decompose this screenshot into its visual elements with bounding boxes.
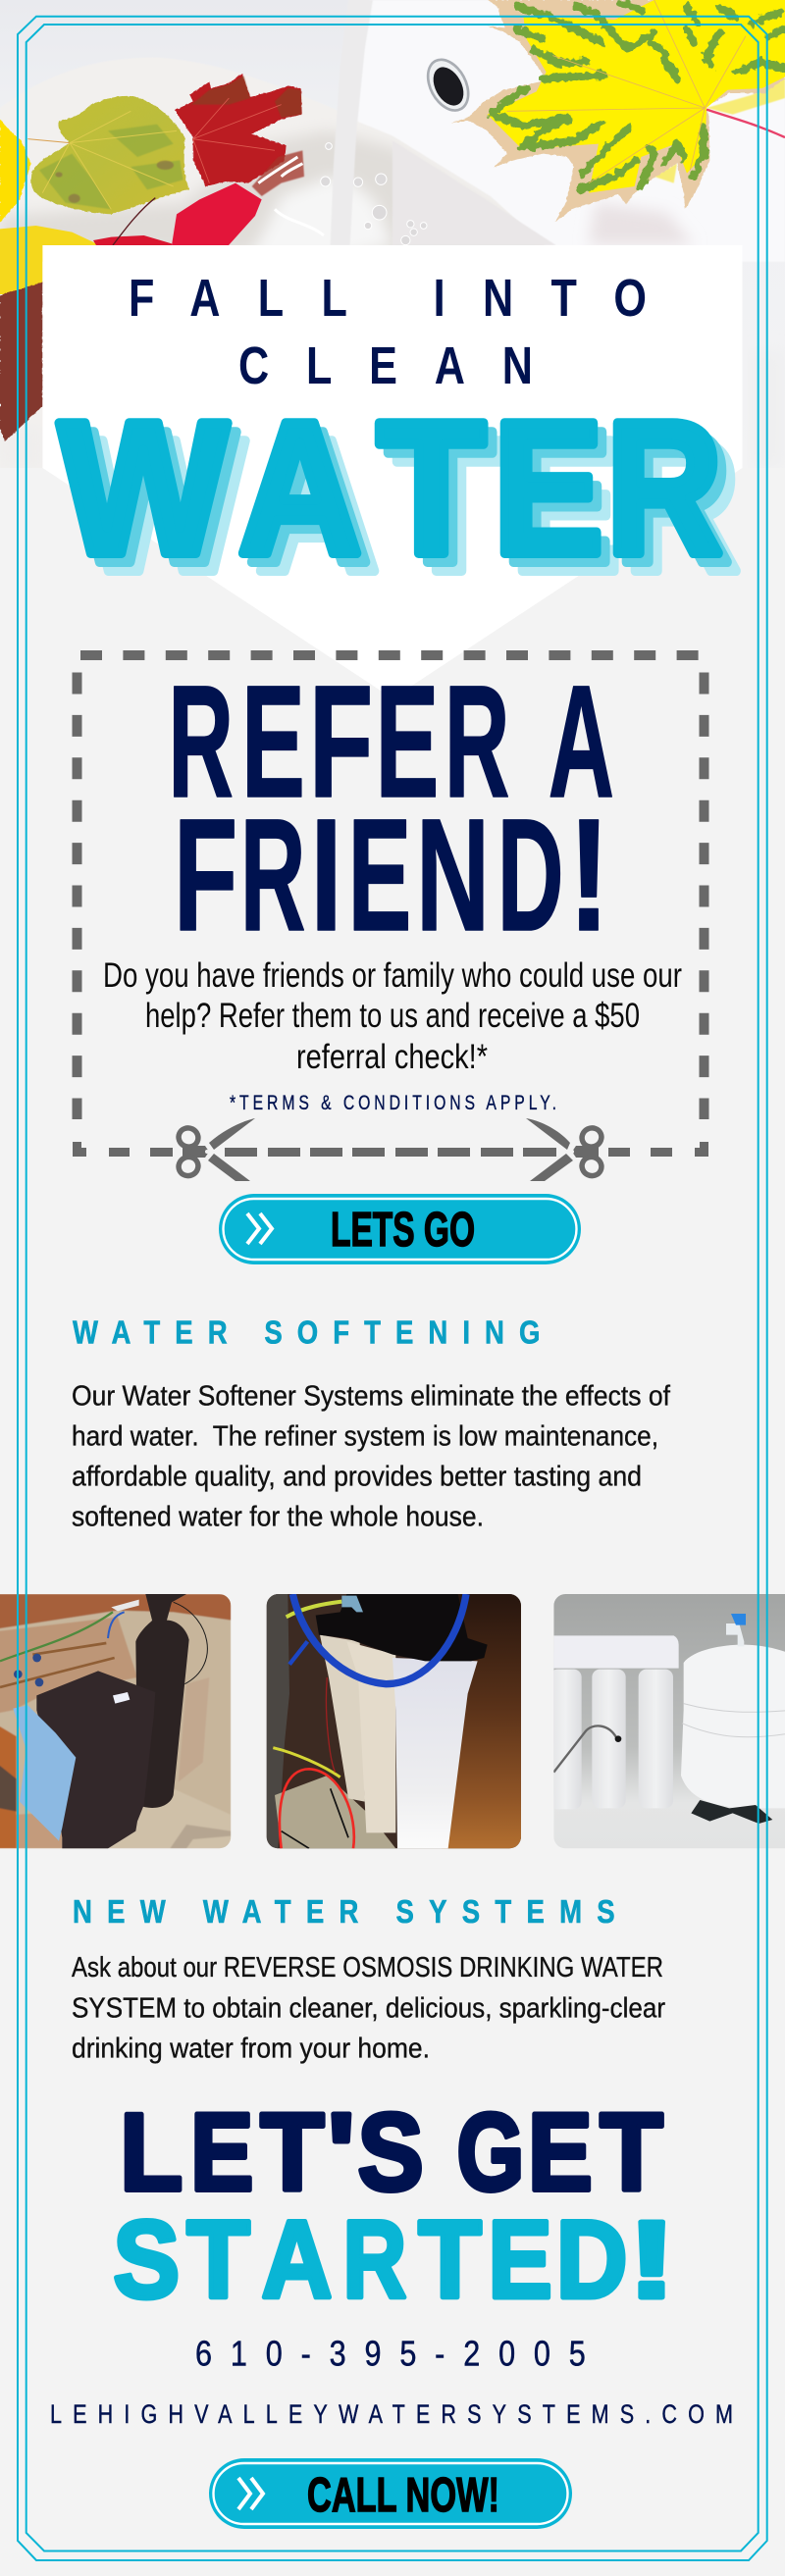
section body	[72, 1381, 671, 1533]
green heart leaf	[27, 96, 189, 214]
faucet tip	[615, 1735, 621, 1742]
button label: LETS GO	[331, 1204, 475, 1257]
black canister caps	[316, 1594, 488, 1661]
cta line 2: R	[343, 2198, 406, 2321]
dark cabinet	[267, 1594, 521, 1848]
filter canister one	[320, 1635, 365, 1802]
cta line 1: E	[528, 2091, 593, 2213]
basin background	[0, 0, 347, 37]
section: new water systems	[72, 1892, 665, 2065]
filter canister two	[346, 1641, 395, 1832]
icon: chevrons	[238, 2478, 263, 2509]
back shadow layer: A	[256, 399, 379, 611]
photo: under-sink filter canisters	[267, 1594, 521, 1848]
pipe valves	[14, 1654, 43, 1686]
referral description	[103, 956, 682, 1076]
heading line 1: F	[309, 651, 373, 831]
call to action: let's get started	[113, 2091, 676, 2321]
brown red leaf	[0, 282, 42, 441]
water splash	[258, 157, 324, 235]
softener tank	[135, 1594, 189, 1808]
brown leaf tips	[191, 76, 301, 118]
floor	[62, 1788, 231, 1848]
website: LEHIGHVALLEYWATERSYSTEMS.COM	[50, 2400, 733, 2430]
title line 1: FALL INTO	[129, 270, 647, 328]
cta line 2: S	[113, 2198, 180, 2321]
heading line 2: !	[567, 785, 610, 964]
section heading: WATER SOFTENING	[73, 1314, 540, 1351]
button inner ring	[224, 1199, 577, 1260]
leaf veins	[42, 111, 177, 209]
heart leaf stem	[27, 139, 70, 143]
description line 2: help? Refer them to us and receive a $50	[145, 997, 640, 1035]
left dashes	[73, 673, 82, 1119]
clear tube	[267, 1594, 289, 1848]
cta line 1: E	[190, 2091, 253, 2213]
section body: SYSTEM to obtain cleaner, delicious, sparkling-clear	[72, 1992, 665, 2024]
photo: reverse osmosis system	[550, 1594, 785, 1848]
right dashes	[699, 673, 708, 1119]
photo: water softener in basement	[0, 1594, 231, 1848]
manifold head	[553, 1635, 679, 1669]
middle shadow layer: W	[68, 390, 236, 602]
tank seam	[682, 1704, 785, 1737]
filter tubes	[550, 1670, 673, 1809]
cement wall	[0, 1594, 231, 1848]
middle shadow layer: E	[502, 390, 612, 602]
wood panel	[442, 1594, 521, 1848]
photo row	[0, 1594, 785, 1848]
green leaf veining	[491, 3, 785, 189]
heading line 1: A	[549, 651, 614, 831]
water bubbles	[321, 143, 427, 245]
brown upper wall	[0, 1594, 231, 1631]
foam area	[253, 175, 392, 245]
back shadow layer: W	[77, 399, 245, 611]
back shadow layer: T	[394, 399, 503, 611]
pink shadow	[589, 203, 694, 245]
button pill	[209, 2458, 572, 2529]
leaf veins	[193, 98, 282, 183]
heading line 2: E	[347, 785, 411, 964]
yellow leaf left bottom	[0, 226, 96, 294]
heading line 2: I	[310, 785, 342, 964]
title: fall into clean	[129, 270, 647, 395]
tank valve	[726, 1623, 744, 1646]
brick wall	[0, 1617, 137, 1717]
running water stream	[331, 0, 373, 245]
heading line 1: R	[168, 651, 234, 831]
heading line 2: N	[416, 785, 490, 964]
cta line 2: E	[488, 2198, 552, 2321]
button: lets go	[219, 1194, 581, 1264]
hoses	[273, 1602, 354, 1848]
right side shade	[753, 351, 785, 468]
photo: sink with autumn leaves	[0, 0, 785, 468]
softener brine box	[36, 1671, 155, 1848]
leaf cream margin	[451, 0, 785, 223]
wood scraps	[0, 1726, 17, 1848]
white canister	[392, 1658, 478, 1848]
front letters: W	[59, 382, 228, 593]
cta line 2: D	[556, 2198, 628, 2321]
heading line 2: F	[174, 785, 237, 964]
bottom dashes	[73, 1142, 708, 1157]
white bracket	[111, 1600, 139, 1611]
cabinet floor	[275, 1776, 395, 1848]
section: water softening	[72, 1314, 671, 1533]
fitting	[341, 1596, 363, 1612]
back shadow layer: E	[511, 399, 621, 611]
brick stack	[13, 1813, 62, 1848]
yellow maple leaf	[451, 0, 785, 223]
cta line 2: T	[186, 2198, 250, 2321]
title line 2: CLEAN	[238, 337, 533, 395]
terms note: *TERMS & CONDITIONS APPLY.	[230, 1091, 556, 1114]
green patches on leaf	[39, 125, 183, 209]
blue valve handle	[731, 1614, 746, 1625]
cta line 2: T	[418, 2198, 482, 2321]
cta line 2: !	[628, 2198, 676, 2321]
lower left shade	[0, 429, 42, 468]
red maple leaf	[175, 74, 302, 186]
leaf yellow body	[488, 0, 785, 193]
white arrow banner panel	[42, 245, 742, 698]
lower red leaf	[172, 183, 262, 248]
button pill	[219, 1194, 581, 1264]
blue salt bag	[13, 1705, 76, 1841]
coupon dashed border	[73, 655, 708, 1181]
leaf veins	[507, 0, 746, 183]
section body: hard water. The refiner system is low maintenance,	[72, 1421, 658, 1453]
cta line 1: T	[260, 2091, 324, 2213]
front letters: T	[377, 382, 486, 593]
white porcelain slope	[356, 0, 785, 262]
section heading: NEW WATER SYSTEMS	[73, 1892, 615, 1931]
water surface	[0, 129, 392, 245]
brown spots	[55, 161, 174, 203]
curled leaf tip	[252, 150, 304, 196]
faucet	[553, 1726, 616, 1773]
heading line 2: R	[240, 785, 306, 964]
dark stem	[113, 198, 155, 245]
icon: chevrons	[247, 1213, 272, 1244]
cta line 1: T	[600, 2091, 663, 2213]
headline: WATER with layered shadow	[59, 382, 740, 611]
front letters: R	[606, 382, 722, 593]
heading line 1: R	[445, 651, 510, 831]
middle shadow layer: R	[615, 390, 731, 602]
cta line 1: '	[328, 2091, 355, 2213]
small red leaf	[93, 235, 172, 245]
icon: right scissors	[526, 1118, 604, 1181]
cta line 1: L	[120, 2091, 183, 2213]
section body: Our Water Softener Systems eliminate the effects of	[72, 1381, 671, 1413]
description line 3: referral check!*	[296, 1038, 488, 1076]
cta line 2: A	[261, 2198, 332, 2321]
front letters: E	[494, 382, 603, 593]
button inner ring	[214, 2463, 567, 2524]
middle shadow layer: T	[386, 390, 495, 602]
middle shadow layer: A	[247, 390, 370, 602]
section body: drinking water from your home.	[72, 2034, 430, 2065]
icon: left scissors	[176, 1118, 255, 1181]
basin interior	[0, 57, 556, 468]
section body	[72, 1952, 665, 2065]
yellow reflection under maple leaf	[654, 78, 785, 183]
front letters: A	[238, 382, 361, 593]
floor shadow	[170, 1825, 231, 1848]
button label: CALL NOW!	[307, 2469, 499, 2522]
section body: Ask about our REVERSE OSMOSIS DRINKING WATER	[72, 1952, 663, 1984]
pipes	[0, 1602, 207, 1687]
blue hose	[292, 1594, 466, 1684]
heading line 2: D	[497, 785, 564, 964]
yellow leaf left top	[0, 120, 31, 223]
water near drain	[392, 153, 555, 245]
box lid highlight	[113, 1692, 130, 1704]
tank stand	[691, 1800, 772, 1824]
rust stain	[179, 1677, 209, 1782]
button: call now	[209, 2458, 572, 2529]
overflow drain	[426, 59, 469, 112]
top dashes	[80, 650, 700, 660]
section body: softened water for the whole house.	[72, 1502, 484, 1533]
back shadow layer: R	[624, 399, 740, 611]
cta line 1: S	[357, 2091, 424, 2213]
heading line 1: E	[241, 651, 305, 831]
cta line 1: G	[457, 2091, 524, 2213]
heading: refer a friend	[168, 651, 614, 964]
red leaf stem	[706, 110, 785, 137]
heading line 1: E	[375, 651, 439, 831]
studio backdrop	[553, 1594, 785, 1848]
storage tank	[681, 1645, 785, 1808]
phone number: 610-395-2005	[195, 2335, 586, 2374]
section body: affordable quality, and provides better tasting and	[72, 1462, 642, 1493]
